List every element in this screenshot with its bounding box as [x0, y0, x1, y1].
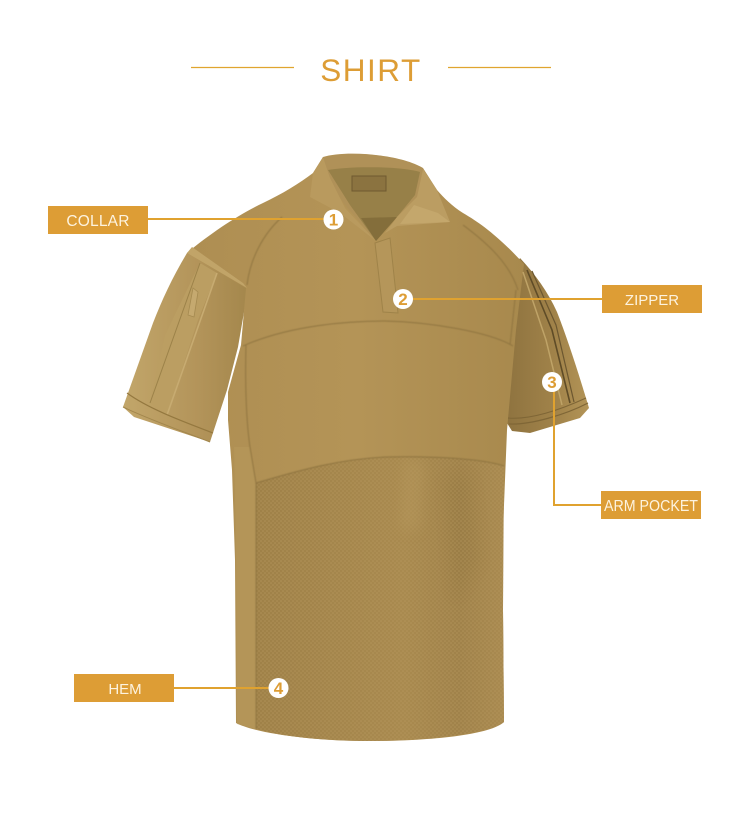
marker 3: 3: [547, 373, 557, 392]
label: collar: COLLAR: [66, 213, 130, 230]
right sleeve pocket: [508, 270, 588, 424]
title: SHIRT: [320, 52, 422, 88]
collar interior: [323, 154, 423, 241]
label: zipper: ZIPPER: [625, 292, 679, 309]
zipper placket: [375, 238, 398, 313]
marker 1: 1: [329, 210, 338, 230]
marker 2: 2: [398, 290, 408, 309]
label: arm pocket: [601, 491, 701, 519]
right sleeve: [500, 258, 589, 433]
callout 4: hem: [74, 674, 288, 702]
label: collar: [48, 206, 148, 234]
left sleeve pocket: [123, 247, 247, 442]
marker 1: [324, 210, 344, 230]
left sleeve: [123, 240, 248, 442]
neck label: [352, 176, 386, 191]
shirt infographic: [48, 59, 702, 741]
label: hem: [74, 674, 174, 702]
mesh panel: [256, 457, 504, 741]
marker 4: 4: [274, 679, 284, 698]
shirt body: [187, 154, 524, 741]
shirt illustration: [123, 154, 589, 741]
seams: [243, 217, 518, 729]
marker 2: [393, 289, 413, 309]
side panel highlight: [234, 447, 256, 729]
marker 3: [542, 372, 562, 392]
label: hem: HEM: [108, 681, 142, 698]
callout 1: collar: [48, 206, 344, 234]
callout 3: arm pocket: [542, 372, 701, 519]
collar right flap: [377, 169, 450, 243]
collar left flap: [310, 157, 376, 241]
label: arm pocket: ARM POCKET: [604, 498, 698, 515]
callout 2: zipper: [393, 285, 702, 313]
marker 4: [268, 678, 288, 698]
label: zipper: [602, 285, 702, 313]
